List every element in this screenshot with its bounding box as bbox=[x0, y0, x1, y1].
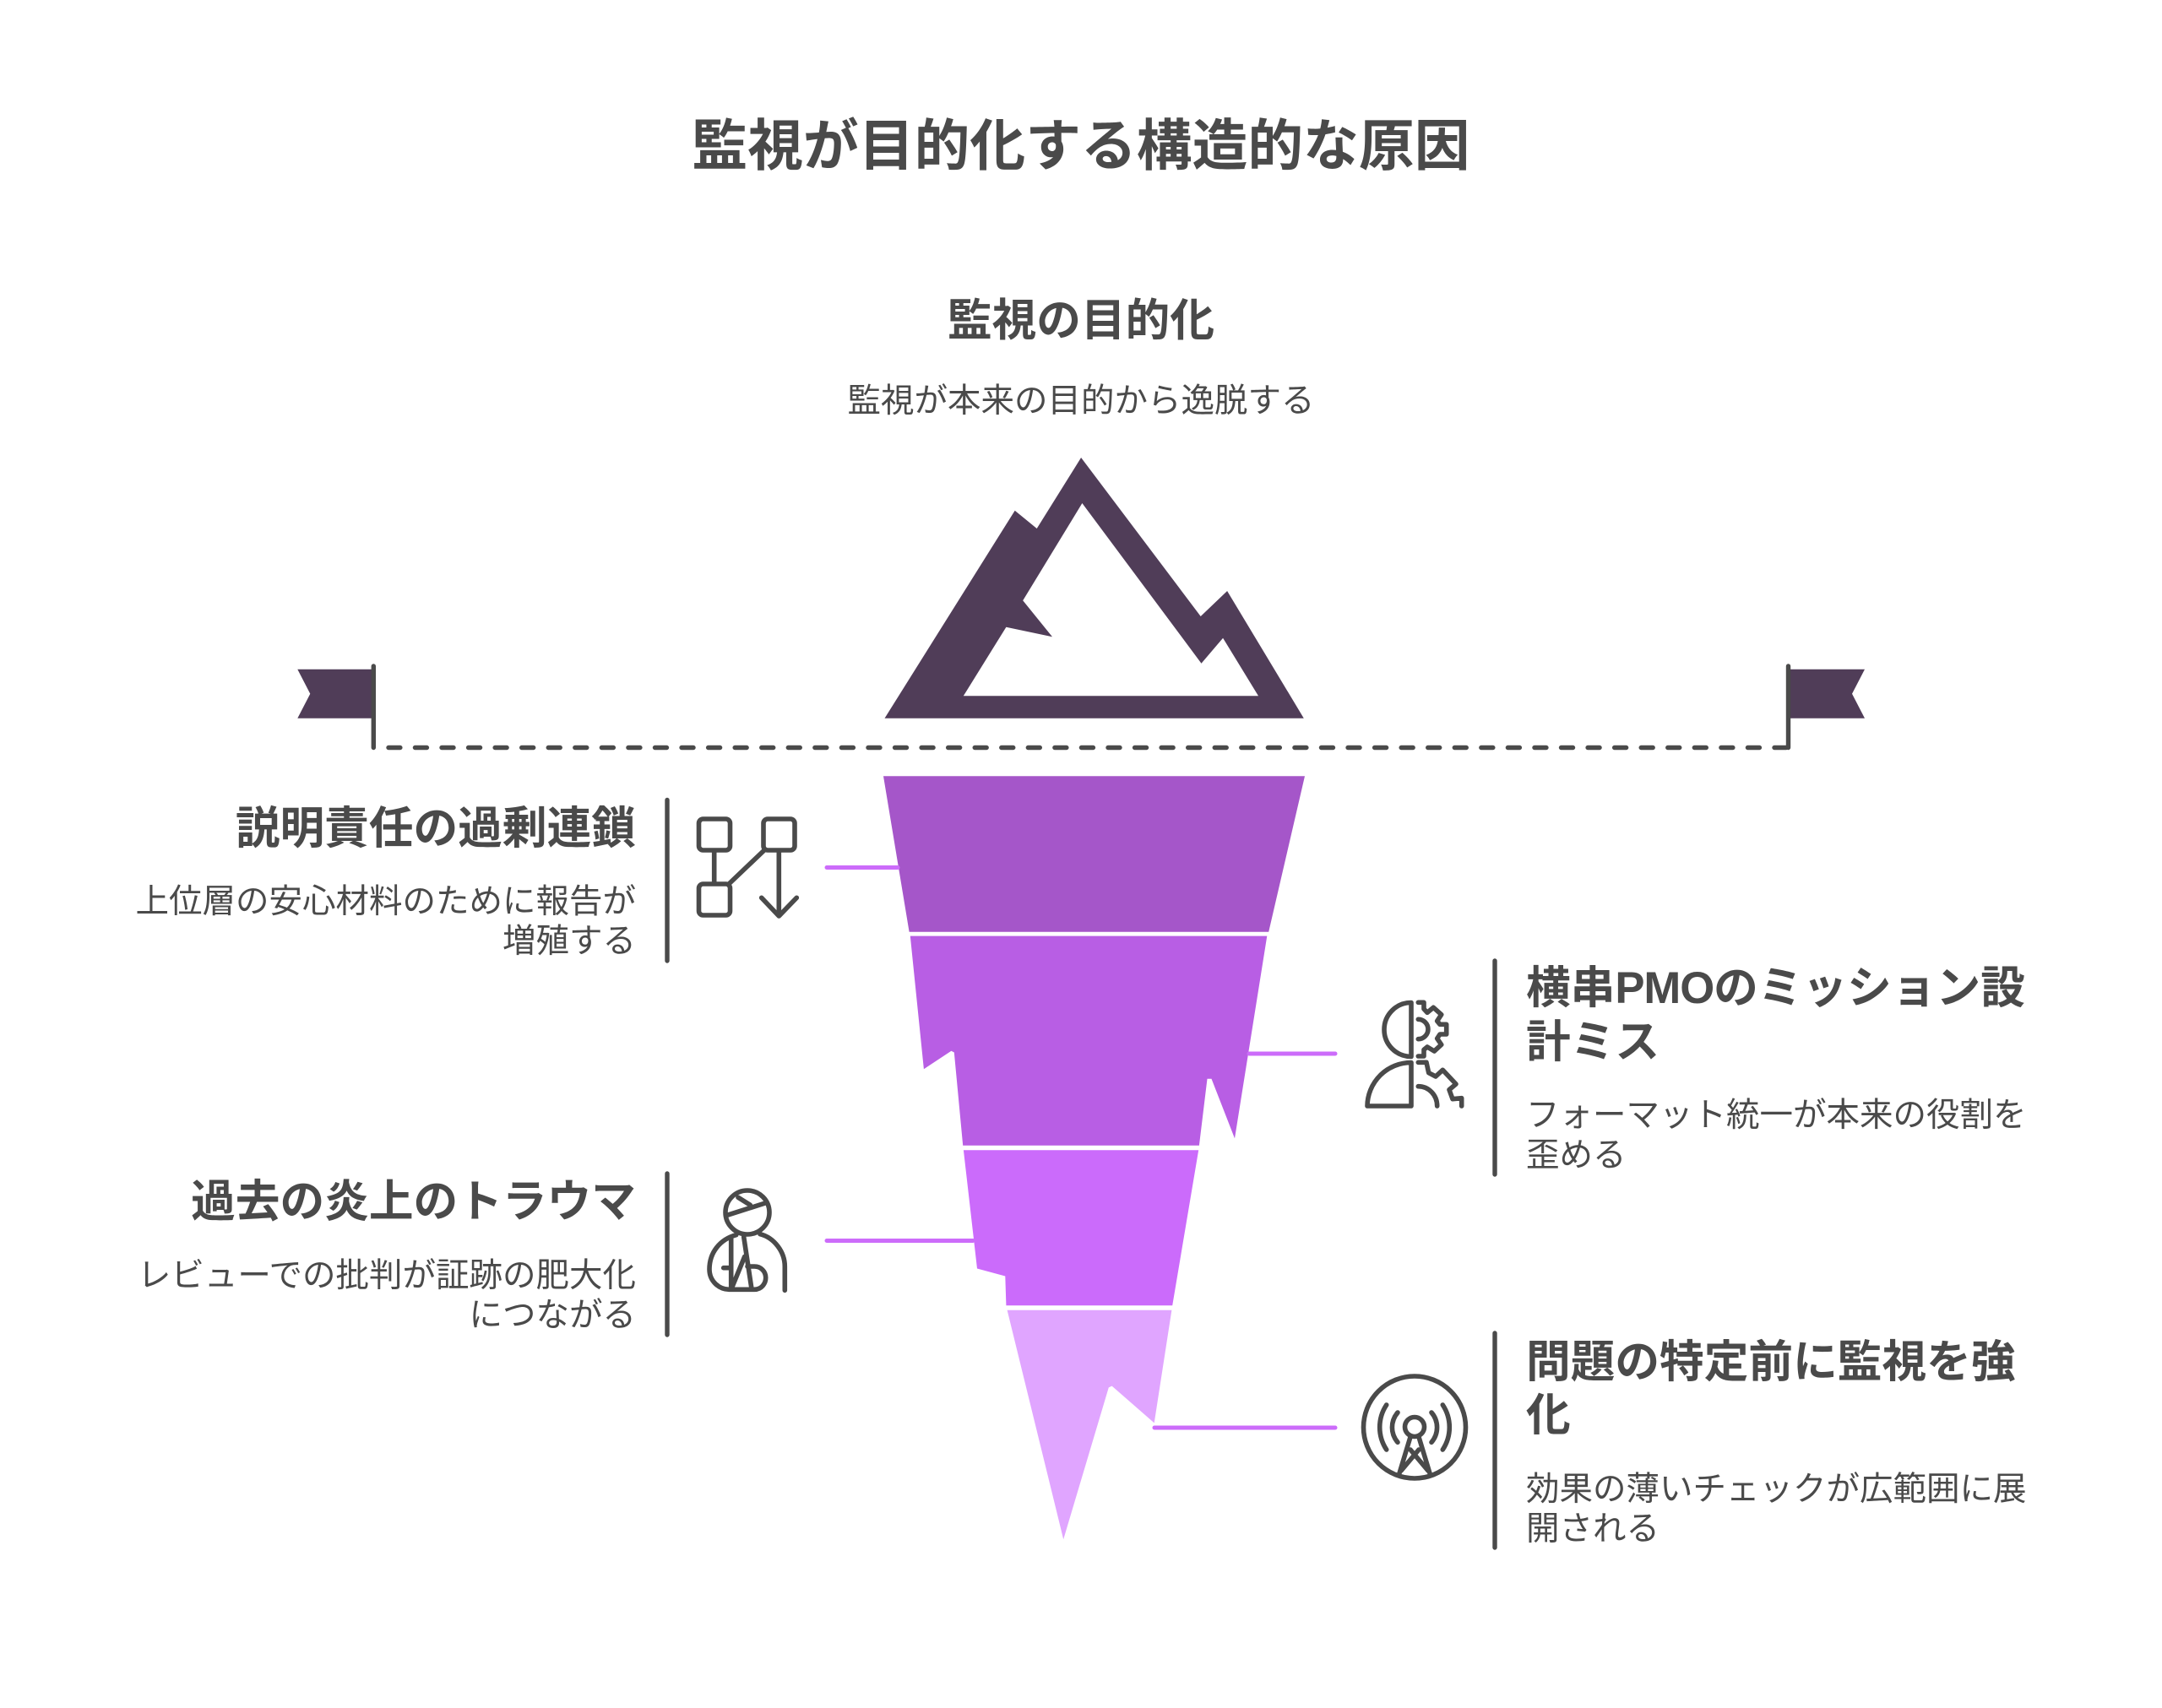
description: 開される bbox=[1526, 1510, 1660, 1548]
divider bbox=[1492, 1333, 1497, 1548]
icon: person and gear bbox=[1367, 1002, 1462, 1106]
left pole bbox=[372, 666, 376, 748]
description: 増殖する bbox=[502, 923, 636, 960]
panel: PMO mission design bbox=[1367, 961, 2027, 1174]
connector 4 bbox=[1154, 1425, 1335, 1430]
connector 2 bbox=[1249, 1052, 1335, 1055]
right pole bbox=[1786, 666, 1790, 748]
iceberg underwater bbox=[883, 776, 1305, 1539]
heading: 過去の炎上のトラウマ bbox=[191, 1177, 636, 1227]
band 4 bbox=[1008, 1310, 1171, 1539]
connector lines bbox=[827, 868, 1335, 1428]
title: 監視が目的化する構造的な原因 bbox=[692, 115, 1470, 177]
panel: accountability chain bbox=[135, 800, 796, 961]
divider bbox=[665, 1174, 670, 1335]
connector 1 bbox=[827, 865, 898, 870]
connector 3 bbox=[827, 1239, 973, 1243]
description: 歪める bbox=[1526, 1136, 1627, 1174]
heading: tip: 監視の目的化 bbox=[948, 296, 1214, 346]
panel: monitoring before problem definition bbox=[1363, 1333, 2027, 1548]
heading: 説明責任の過剰連鎖 bbox=[236, 804, 636, 854]
heading: 計ミス bbox=[1526, 1017, 1660, 1067]
icon: signal tower bbox=[1363, 1376, 1466, 1478]
icon: flow chart bbox=[699, 819, 796, 916]
text: tip description: 監視が本来の目的から逸脱する bbox=[848, 382, 1314, 420]
description: 上位層の安心材料のために報告が bbox=[135, 883, 636, 920]
waterline with flags bbox=[297, 666, 1865, 748]
divider bbox=[1492, 961, 1497, 1174]
left flag bbox=[297, 670, 373, 718]
band 3 bbox=[964, 1150, 1198, 1305]
band 2 bbox=[910, 936, 1267, 1146]
right flag bbox=[1790, 670, 1865, 718]
description: につながる bbox=[470, 1297, 636, 1334]
description: レビューでの批判が証跡の肥大化 bbox=[138, 1257, 636, 1294]
panel: iceberg tip heading bbox=[848, 296, 1314, 420]
description: フォーマット統一が本来の役割を bbox=[1526, 1097, 2027, 1134]
divider bbox=[665, 800, 670, 961]
icon: injured person bbox=[709, 1190, 785, 1290]
description: 効果の薄いチェックが広範囲に展 bbox=[1526, 1471, 2027, 1508]
icon: mountain iceberg tip bbox=[885, 458, 1304, 718]
band 1 bbox=[883, 776, 1305, 932]
panel: past flame trauma bbox=[138, 1174, 785, 1335]
heading: 化 bbox=[1526, 1391, 1571, 1440]
heading: 横串PMOのミッション設 bbox=[1526, 963, 2025, 1013]
dashed waterline bbox=[388, 746, 1786, 750]
heading: 問題の特定前に監視を強 bbox=[1526, 1337, 2016, 1387]
